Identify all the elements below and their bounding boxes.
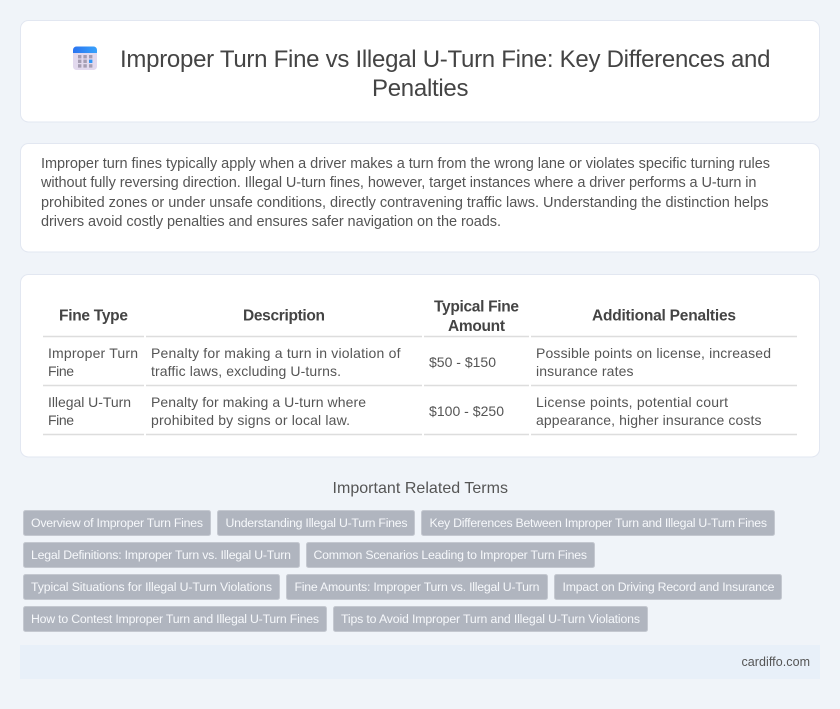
- table header row: [59, 298, 736, 335]
- table row: illegal u-turn fine: prohibited by signs or local law.: [151, 412, 350, 428]
- footer bar: cardiffo.com: [742, 655, 810, 669]
- table header row: Amount: [448, 318, 505, 335]
- title: Penalties: [372, 75, 468, 102]
- table header row: Fine Type: [59, 308, 128, 324]
- table row: improper turn fine: Possible points on license, increased: [536, 345, 771, 361]
- related terms tags: Key Differences Between Improper Turn and Illegal U-Turn Fines: [430, 516, 767, 530]
- related terms tags: Overview of Improper Turn Fines: [31, 516, 203, 530]
- table header row: Additional Penalties: [592, 308, 736, 324]
- related terms tags: Impact on Driving Record and Insurance: [562, 580, 775, 594]
- related terms tags: Tips to Avoid Improper Turn and Illegal U-Turn Violations: [341, 612, 640, 626]
- related terms tags: Common Scenarios Leading to Improper Turn Fines: [314, 548, 587, 562]
- summary text: drivers avoid costly penalties and ensures safer navigation on the roads.: [41, 214, 501, 230]
- related terms tags: Fine Amounts: Improper Turn vs. Illegal U-Turn: [294, 580, 540, 594]
- summary text: prohibited zones or under unsafe conditions, directly contravening traffic laws. Understanding the distinction helps: [41, 195, 768, 211]
- panel: summary paragraph: [20, 144, 820, 252]
- table row: illegal u-turn fine: Illegal U-Turn: [48, 394, 131, 410]
- table row: improper turn fine: [48, 345, 771, 379]
- related terms heading: Important Related Terms: [332, 480, 508, 497]
- table row: illegal u-turn fine: License points, potential court: [536, 394, 728, 410]
- table row: improper turn fine: Fine: [48, 363, 74, 379]
- table row: illegal u-turn fine: Fine: [48, 412, 74, 428]
- table row: illegal u-turn fine: Penalty for making a U-turn where: [151, 394, 366, 410]
- table row: improper turn fine: insurance rates: [536, 363, 634, 379]
- table row: illegal u-turn fine: appearance, higher insurance costs: [536, 412, 762, 428]
- related terms tags: Legal Definitions: Improper Turn vs. Illegal U-Turn: [31, 548, 291, 562]
- related terms tags: Understanding Illegal U-Turn Fines: [226, 516, 408, 530]
- summary text: [40, 156, 770, 230]
- title: Improper Turn Fine vs Illegal U-Turn Fine: Key Differences and: [120, 46, 770, 73]
- table row: illegal u-turn fine: [48, 394, 762, 428]
- footer bar: [20, 645, 820, 679]
- related terms tags: How to Contest Improper Turn and Illegal U-Turn Fines: [31, 612, 319, 626]
- table row: improper turn fine: Improper Turn: [48, 345, 138, 361]
- table header row: Typical Fine: [434, 298, 519, 316]
- icon: calendar: [73, 46, 97, 70]
- related terms tags: Typical Situations for Illegal U-Turn Violations: [31, 580, 272, 594]
- panel: comparison table: [20, 274, 820, 457]
- table row: illegal u-turn fine: $100 - $250: [429, 403, 504, 419]
- table row: improper turn fine: traffic laws, excluding U-turns.: [151, 363, 341, 379]
- panel: header: [20, 20, 820, 122]
- table row: improper turn fine: Penalty for making a turn in violation of: [151, 345, 401, 361]
- table row: improper turn fine: $50 - $150: [429, 354, 496, 370]
- summary text: Improper turn fines typically apply when a driver makes a turn from the wrong lane or violates specific turning rules: [41, 156, 770, 172]
- title: [120, 46, 770, 102]
- related terms tags: [24, 510, 782, 632]
- summary text: without fully reversing direction. Illegal U-turn fines, however, target instances where a driver performs a U-turn in: [40, 175, 756, 191]
- table header row: Description: [243, 308, 325, 324]
